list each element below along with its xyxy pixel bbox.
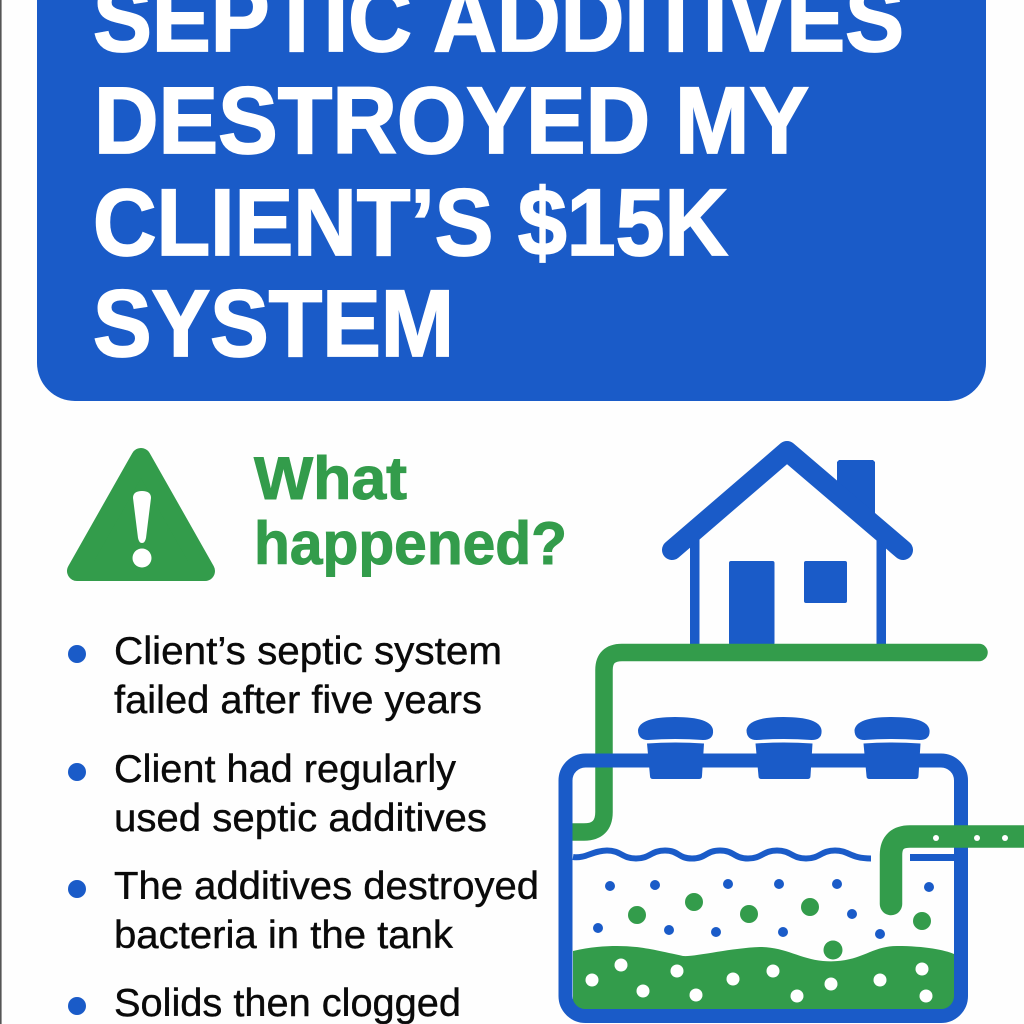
lid 1	[638, 717, 713, 779]
title: DESTROYED MY	[94, 68, 809, 174]
lid 3	[854, 717, 930, 779]
bullet 3: The additives destroyed	[114, 865, 539, 908]
bullet 1: Client’s septic system	[114, 630, 502, 673]
heading: what happened: happened?	[254, 510, 567, 577]
bullet 1: failed after five years	[114, 679, 482, 722]
heading: what happened	[254, 445, 567, 577]
suspended particles	[593, 879, 934, 960]
title: CLIENT’S $15K	[93, 170, 728, 276]
water surface wave	[573, 850, 954, 861]
lid 2	[746, 717, 822, 779]
sludge layer	[573, 946, 954, 1009]
inlet pipe	[570, 652, 979, 832]
bullet 1	[68, 630, 502, 722]
header panel	[37, 0, 986, 401]
septic tank outline	[566, 760, 961, 1016]
tank lids	[638, 717, 930, 779]
bullet 4: Solids then clogged	[114, 982, 461, 1024]
bullet list	[68, 630, 539, 1024]
bullet 3	[68, 865, 539, 957]
outlet pipe	[891, 835, 1024, 904]
bullet 2	[68, 748, 487, 840]
title	[93, 0, 904, 377]
icon: warning triangle	[77, 458, 205, 571]
title: SYSTEM	[93, 271, 454, 377]
heading: what happened: What	[254, 445, 407, 512]
bullet 3: bacteria in the tank	[114, 914, 454, 957]
icon: house	[672, 451, 903, 646]
bullet 2: used septic additives	[114, 797, 487, 840]
bullet 2: Client had regularly	[114, 748, 457, 791]
